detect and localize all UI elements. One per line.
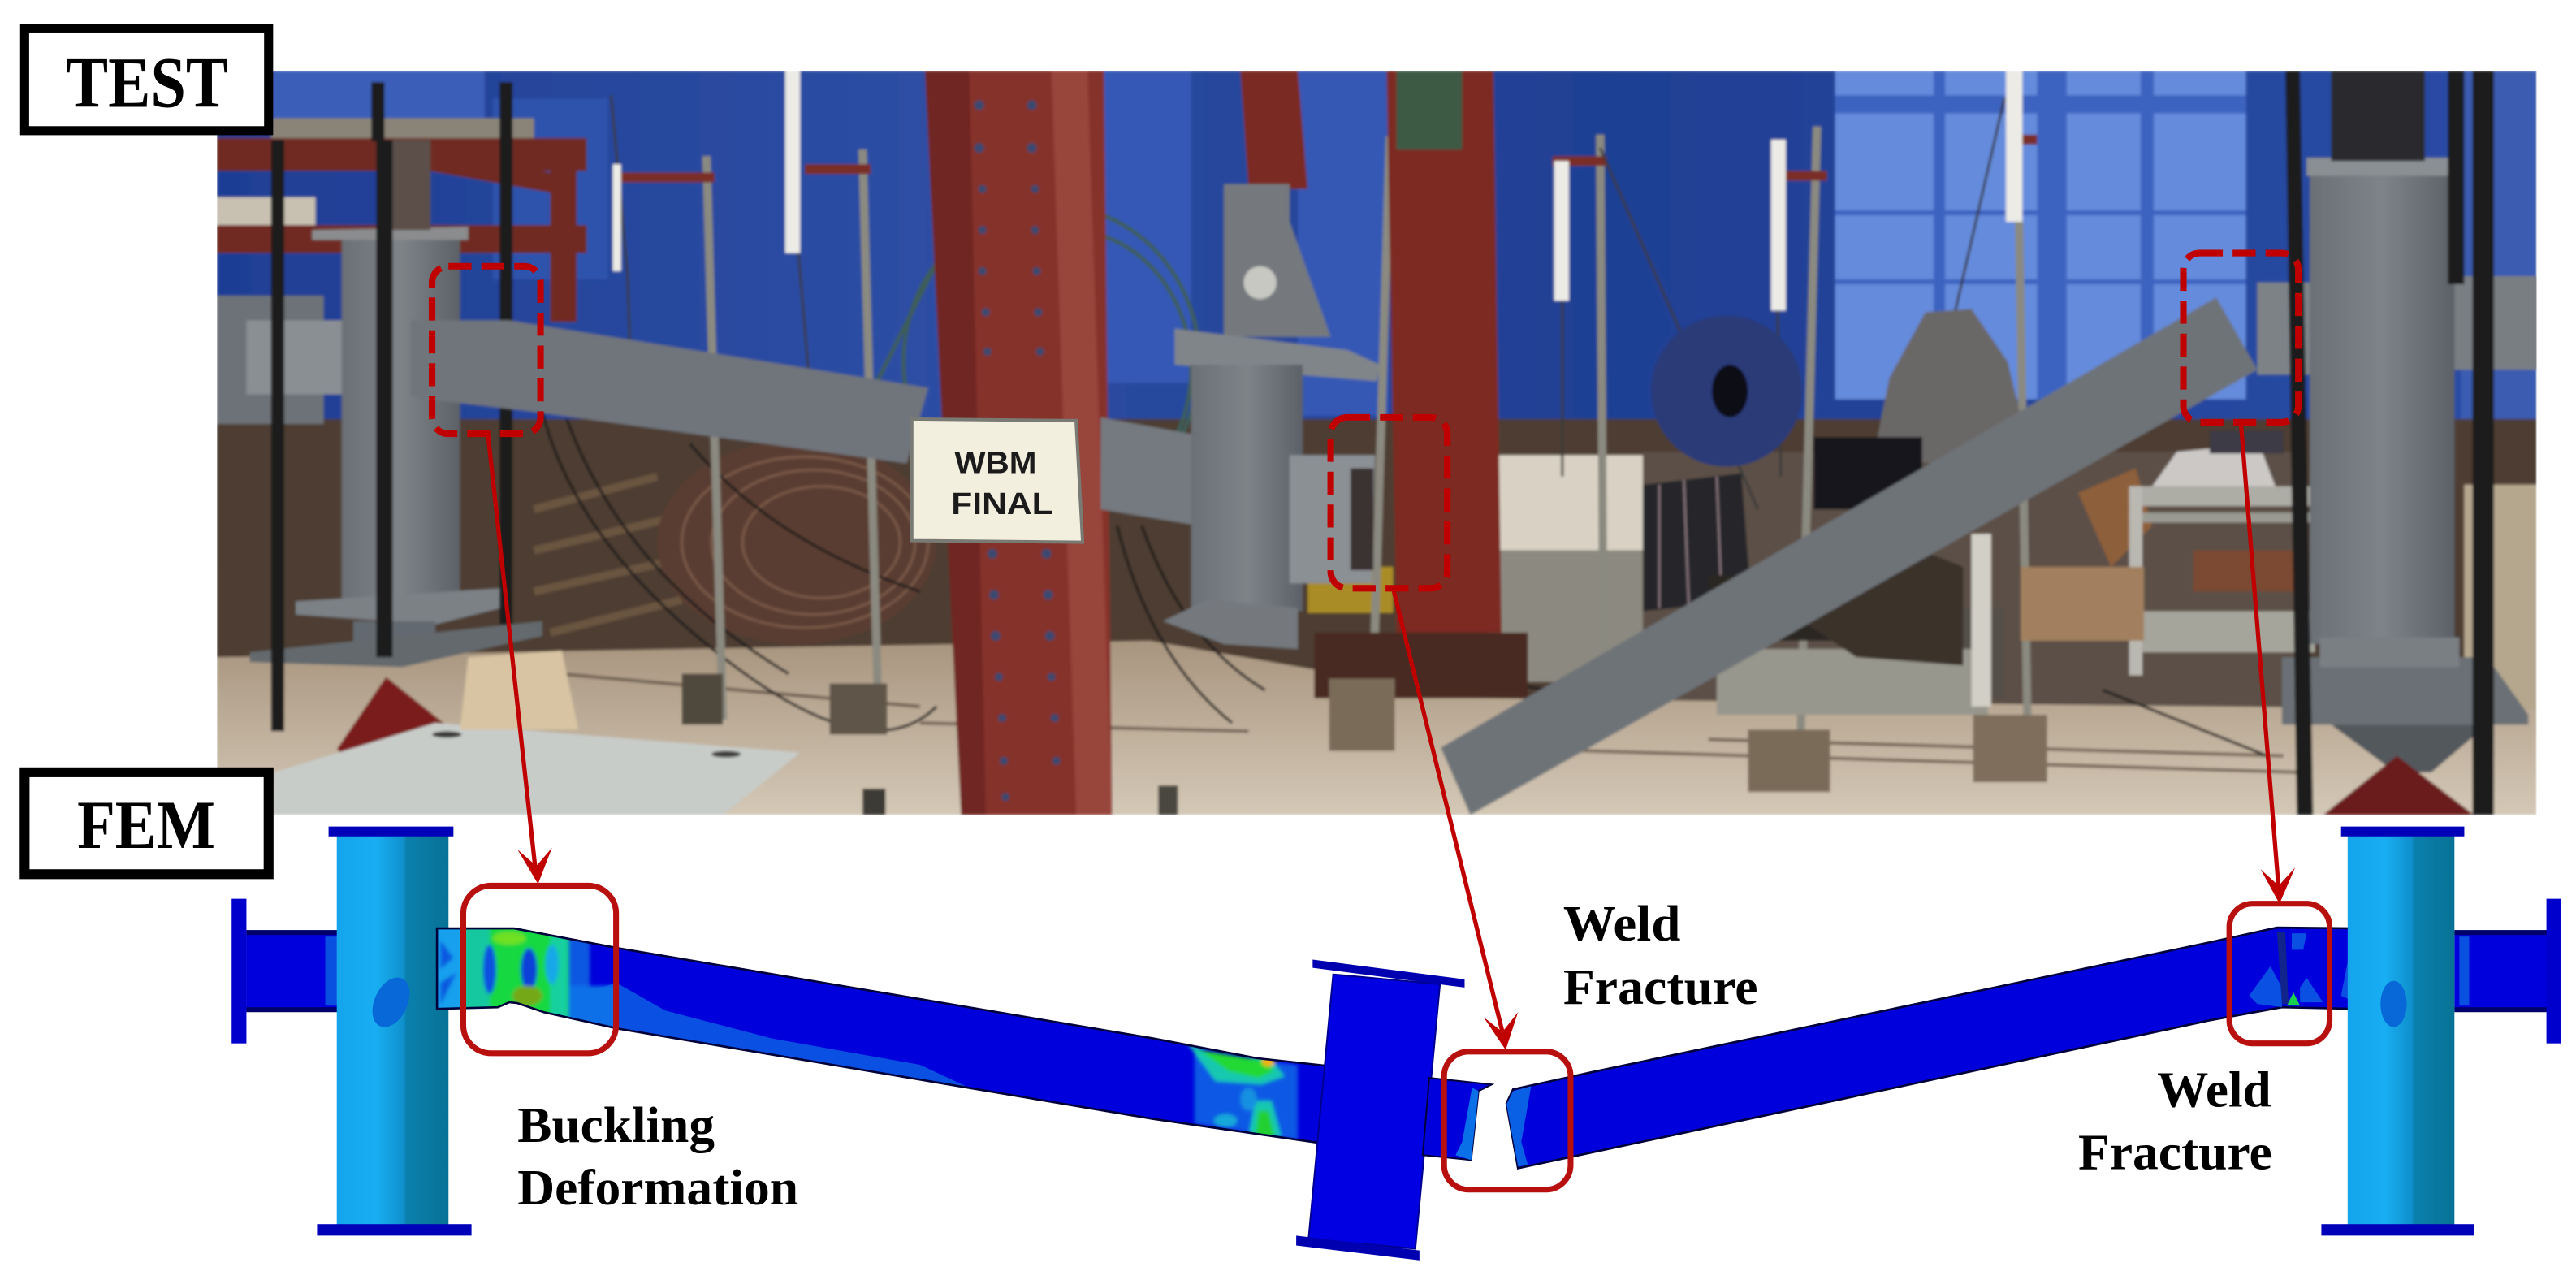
highlight: FEM buckling region (463, 885, 616, 1053)
FEM right column (2321, 827, 2561, 1235)
FEM buckled beam (427, 920, 1347, 1150)
label: Buckling Deformation: Buckling (517, 1096, 715, 1153)
stress field near center joint (1186, 1042, 1298, 1140)
window mullions (1835, 71, 2245, 400)
label: Weld Fracture center: Weld (1563, 895, 1681, 952)
sign: WBM FINAL: WBM (954, 446, 1036, 481)
label box: FEM (24, 772, 269, 874)
FEM fractured stub (1423, 1078, 1492, 1160)
highlight: FEM right fracture (2229, 904, 2330, 1044)
label box: FEM: FEM (77, 787, 215, 863)
label box: TEST (24, 28, 269, 131)
highlight: FEM center fracture (1444, 1052, 1571, 1190)
dashed highlight: center fracture in test (1331, 417, 1447, 588)
dashed highlight: left buckling in test (432, 266, 541, 434)
sensors and support posts (707, 127, 2027, 739)
deformed test beam (411, 321, 928, 464)
label: Weld Fracture center (1563, 895, 1758, 1015)
fabric pile (1873, 309, 2027, 464)
red column with bolt holes (925, 71, 1113, 815)
green cables (875, 213, 1199, 433)
left red frame (217, 138, 586, 322)
dashed highlight: right fracture in test (2184, 253, 2298, 422)
lower wall and clutter background (217, 419, 2536, 731)
label box: TEST: TEST (66, 43, 228, 123)
label: Weld Fracture right: Fracture (2078, 1123, 2272, 1180)
arrow: center test to FEM (1393, 588, 1518, 1050)
stress band along lower edge (559, 983, 1068, 1134)
label: Buckling Deformation (517, 1096, 798, 1216)
label: Weld Fracture right (2078, 1062, 2272, 1180)
right clutter and table (1709, 430, 2318, 715)
FEM fractured beam (1506, 928, 2356, 1168)
right test column assembly (2258, 71, 2538, 815)
FEM right weld region (2249, 932, 2356, 1007)
arrow: right test to FEM (2241, 422, 2295, 904)
sign: WBM FINAL (912, 419, 1083, 543)
FEM left column (231, 827, 472, 1235)
fractured diagonal beam (1441, 297, 2258, 815)
concrete blocks (682, 673, 2047, 815)
sign: WBM FINAL: FINAL (951, 486, 1053, 521)
left test column assembly (217, 82, 542, 772)
panel: test photograph (217, 71, 2538, 815)
stress field at the buckle (427, 920, 616, 1036)
fan (1651, 315, 1802, 467)
floor slab (271, 723, 800, 815)
floor (217, 641, 2536, 815)
label: Weld Fracture center: Fracture (1563, 958, 1758, 1015)
window light patches (273, 71, 2536, 419)
wooden rack and coil (534, 440, 936, 644)
panel: FEM model (231, 827, 2561, 1261)
FEM center column (1296, 959, 1464, 1261)
curtain background (217, 71, 2463, 421)
label: Weld Fracture right: Weld (2157, 1062, 2271, 1118)
central red column back (1240, 71, 1307, 189)
label: Buckling Deformation: Deformation (517, 1159, 798, 1216)
black box and cable bundle (1813, 437, 1922, 509)
yellow hydraulic tool (1307, 567, 1393, 613)
center test column assembly (1163, 184, 1380, 649)
stool (460, 651, 578, 729)
arrow: left test to FEM (488, 434, 552, 884)
loose cables (542, 411, 2267, 756)
